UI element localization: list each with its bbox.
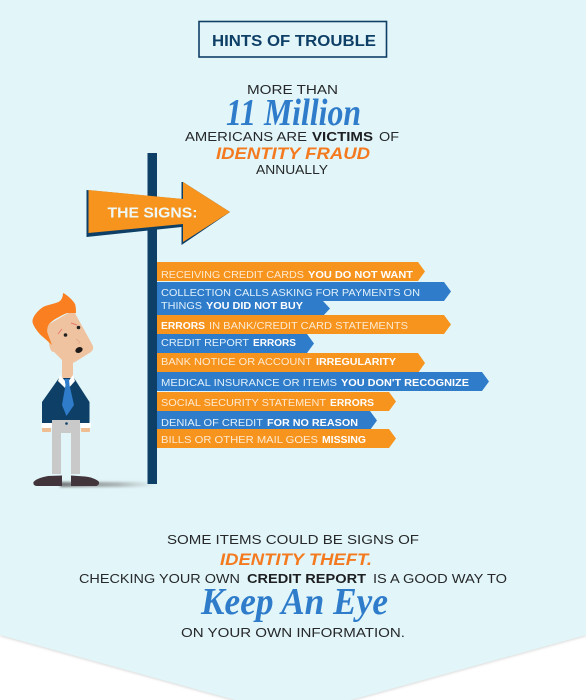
jacket [42, 378, 90, 423]
sign 8: FOR NO REASON [267, 417, 358, 429]
sign 5 [157, 353, 425, 373]
closing message: SOME ITEMS COULD BE SIGNS OF [167, 533, 419, 547]
sign 7: ERRORS [330, 397, 374, 409]
sign 6: YOU DON'T RECOGNIZE [341, 377, 469, 389]
arrow sign: the signs [86, 182, 230, 245]
sign 4 [157, 334, 314, 353]
headline statistic: MORE THAN [247, 83, 338, 97]
sign 6: MEDICAL INSURANCE OR ITEMS [161, 377, 337, 389]
sign 2: THINGS [161, 300, 202, 312]
shoes [33, 476, 99, 486]
face [47, 312, 93, 363]
sign 5: BANK NOTICE OR ACCOUNT [161, 356, 313, 368]
sign 9: BILLS OR OTHER MAIL GOES [161, 434, 318, 446]
signpost pole [148, 153, 157, 484]
mouth [74, 346, 84, 354]
headline statistic: VICTIMS [312, 130, 373, 144]
neck [62, 355, 73, 380]
brows [58, 323, 77, 334]
headline statistic: AMERICANS ARE [185, 130, 307, 144]
sign 8 [157, 411, 377, 430]
sign 9 [157, 429, 396, 448]
sign 1: RECEIVING CREDIT CARDS [161, 269, 304, 281]
eyes [64, 333, 67, 337]
title box: HINTS OF TROUBLE [212, 33, 376, 50]
headline statistic: ANNUALLY [256, 163, 329, 177]
closing message: IS A GOOD WAY TO [373, 572, 507, 586]
closing message: CHECKING YOUR OWN [79, 572, 240, 586]
sign 3: ERRORS [161, 320, 205, 332]
closing message: CREDIT REPORT [247, 572, 366, 586]
closing message: Keep An Eye [200, 581, 388, 623]
sign 7: SOCIAL SECURITY STATEMENT [161, 397, 327, 409]
sign 2: YOU DID NOT BUY [206, 300, 303, 312]
sign 6 [157, 372, 489, 391]
sign 1: YOU DO NOT WANT [308, 269, 414, 281]
sign 7 [157, 392, 396, 411]
sign 3: IN BANK/CREDIT CARD STATEMENTS [209, 320, 408, 332]
headline statistic: OF [379, 130, 399, 144]
closing message [79, 533, 507, 640]
title box [199, 22, 386, 57]
tie [62, 379, 74, 416]
headline statistic: 11 Million [226, 92, 361, 134]
nose [76, 339, 80, 344]
hands [42, 427, 90, 432]
sign 5: IRREGULARITY [316, 356, 396, 368]
sign 9: MISSING [322, 434, 366, 446]
closing message: IDENTITY THEFT. [220, 550, 372, 569]
ground shadow [60, 482, 158, 487]
closing message: ON YOUR OWN INFORMATION. [181, 626, 405, 640]
sign 4: CREDIT REPORT [161, 337, 250, 349]
trousers [52, 420, 80, 474]
hair [32, 293, 76, 345]
sign 8: DENIAL OF CREDIT [161, 417, 264, 429]
button [65, 422, 68, 425]
sign 2 [157, 282, 451, 316]
sign 4: ERRORS [253, 337, 296, 349]
sign 2: COLLECTION CALLS ASKING FOR PAYMENTS ON [161, 287, 420, 299]
worried man character [32, 293, 99, 486]
headline statistic: IDENTITY FRAUD [216, 144, 370, 163]
collar [58, 375, 75, 390]
sign 1 [157, 262, 425, 281]
headline statistic [185, 83, 399, 177]
sign 3 [157, 315, 451, 334]
arrow sign: the signs: THE SIGNS: [108, 204, 198, 222]
cuffs [42, 422, 91, 428]
